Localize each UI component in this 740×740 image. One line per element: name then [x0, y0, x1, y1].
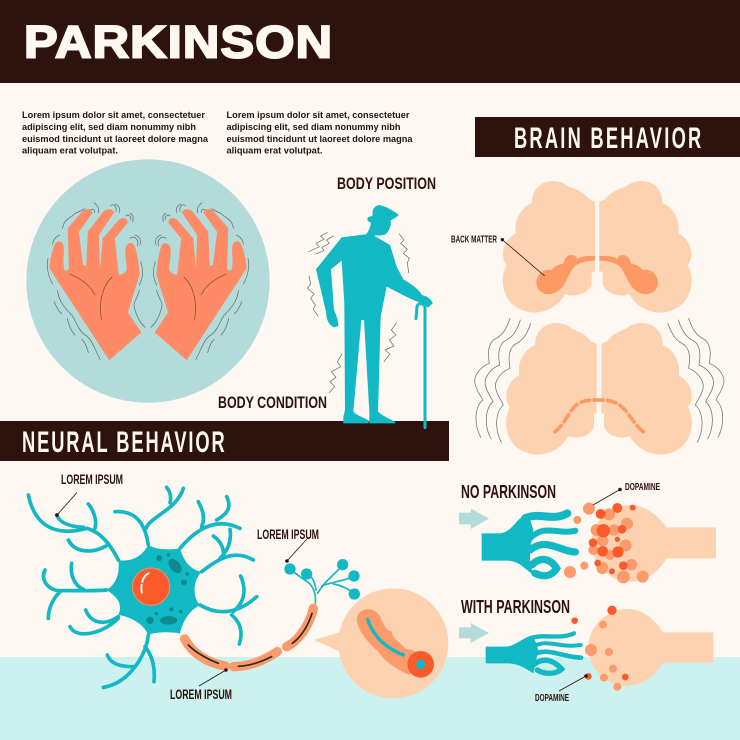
label: lorem ipsum axon: LOREM IPSUM: [170, 687, 232, 702]
icon: standing figure: [316, 205, 433, 423]
tremor waves: [475, 318, 531, 442]
text block: right column: euismod tincidunt ut laoreet dolore magna: [226, 134, 413, 145]
label: dopamine bottom: [535, 674, 588, 704]
label: lorem ipsum dendrite: LOREM IPSUM: [61, 472, 123, 487]
label: lorem ipsum terminal: LOREM IPSUM: [257, 527, 319, 542]
panel: affected brain: [475, 318, 724, 455]
label: lorem ipsum dendrite: [55, 472, 123, 517]
text block: left column: Lorem ipsum dolor sit amet, consectetuer: [22, 110, 205, 121]
dopamine vesicles: [564, 503, 649, 583]
heading: no parkinson: NO PARKINSON: [461, 482, 556, 502]
panel: with parkinson synapse: [459, 606, 713, 691]
title: PARKINSON: [24, 18, 332, 68]
title banner: [0, 0, 740, 83]
icon: cane: [416, 304, 425, 428]
text block: right column: Lorem ipsum dolor sit amet, consectetuer: [226, 110, 410, 121]
receiving terminal: [592, 505, 716, 582]
arrow: [459, 508, 489, 529]
text block: left column: euismod tincidunt ut laoreet dolore magna: [22, 134, 209, 145]
organelles: [146, 553, 189, 625]
heading: with parkinson: WITH PARKINSON: [461, 597, 570, 617]
heading: body position: BODY POSITION: [337, 175, 436, 193]
banner: brain behavior: [475, 117, 740, 157]
axon with myelin: [185, 608, 313, 667]
figure tremor lines: [307, 233, 409, 393]
nucleus: [132, 568, 170, 605]
panel: trembling hands: [26, 159, 270, 403]
dendrites: [28, 487, 257, 687]
text block: right column: [226, 110, 413, 156]
back matter region: [536, 255, 595, 294]
dopamine vesicles: [585, 621, 621, 691]
text block: left column: adipiscing elit, sed diam nonummy nibh: [22, 122, 196, 133]
panel: no parkinson synapse: [459, 503, 716, 583]
text block: left column: [22, 110, 209, 156]
arrow: [459, 623, 489, 643]
back matter leader: [501, 238, 545, 276]
sending terminal: [482, 513, 575, 578]
cell body: [107, 545, 202, 635]
label: dopamine bottom: DOPAMINE: [535, 693, 569, 704]
text block: left column: aliquam erat volutpat.: [22, 146, 118, 156]
receiving terminal: [588, 609, 713, 686]
banner: brain behavior: BRAIN BEHAVIOR: [514, 123, 701, 155]
heading: body condition: BODY CONDITION: [218, 393, 327, 412]
label: lorem ipsum terminal: [257, 527, 319, 563]
diagram: neuron: [28, 487, 360, 687]
callout: axon detail: [314, 588, 448, 698]
label: back matter: BACK MATTER: [451, 234, 497, 246]
text block: right column: adipiscing elit, sed diam nonummy nibh: [226, 122, 401, 133]
banner: neural behavior: [0, 421, 449, 461]
sending terminal: [486, 633, 581, 673]
faded dopamine path: [555, 400, 643, 432]
axon terminal: [284, 559, 360, 603]
panel: healthy brain: [501, 181, 692, 313]
label: dopamine top: DOPAMINE: [625, 482, 660, 493]
text block: right column: aliquam erat volutpat.: [226, 146, 322, 156]
label: lorem ipsum axon: [170, 668, 232, 702]
label: dopamine top: [593, 482, 660, 505]
figure: elderly man with cane: [307, 205, 433, 428]
banner: neural behavior: NEURAL BEHAVIOR: [22, 427, 225, 459]
